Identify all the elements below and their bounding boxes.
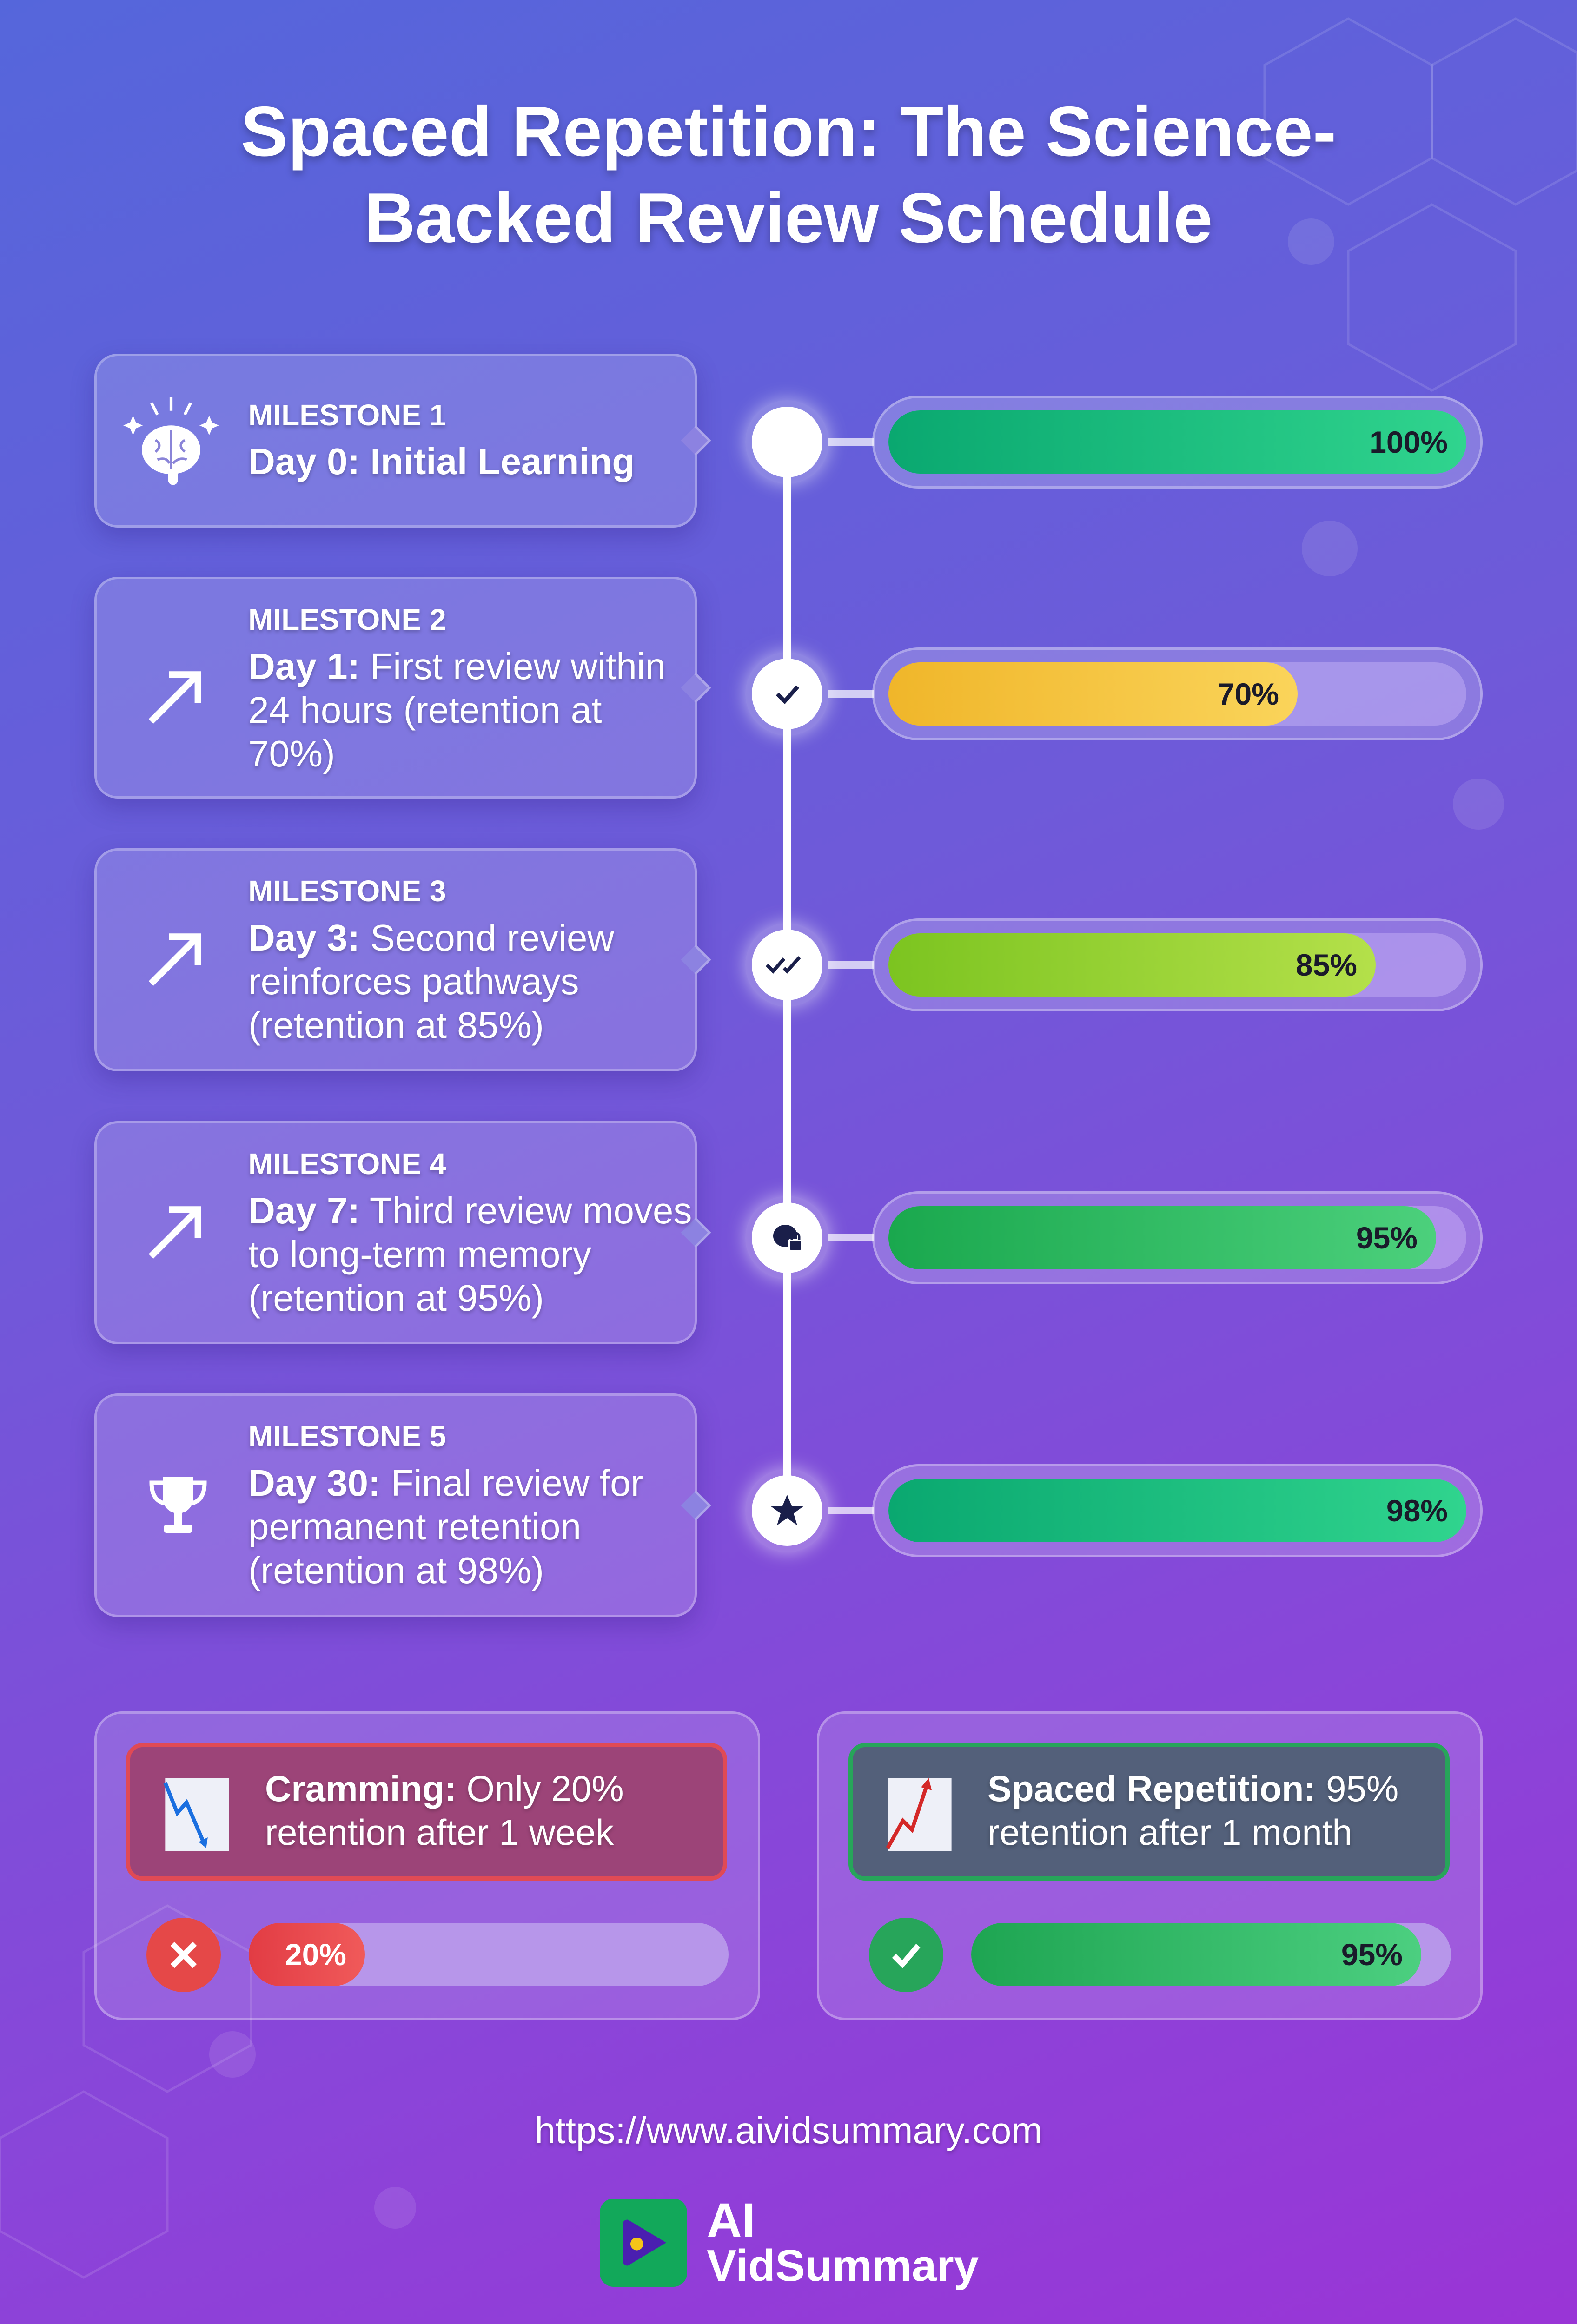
bar 100% [872, 396, 1483, 489]
milestone 2 card: Day 1: First review within [248, 646, 666, 687]
icon: arrow [143, 1198, 208, 1263]
milestone 3 card: MILESTONE 3 [248, 874, 446, 908]
panel: cramming [94, 1711, 760, 2020]
bar 20% [249, 1923, 729, 1986]
milestone 5 card: Day 30: Final review for [248, 1462, 643, 1504]
bar 20%: 20% [285, 1937, 346, 1972]
node 5: star [745, 1469, 829, 1552]
node 1 [745, 400, 829, 484]
bar 98% [872, 1464, 1483, 1557]
milestone 4 card [94, 1121, 697, 1344]
callout: cramming: retention after 1 week [265, 1812, 614, 1853]
panel: spaced repetition [817, 1711, 1483, 2020]
bar 85%: 85% [1296, 948, 1357, 982]
milestone 2 card: 24 hours (retention at [248, 689, 602, 731]
milestone 2 card: 70%) [248, 733, 335, 774]
icon: x [146, 1918, 221, 1992]
bar 70% [872, 647, 1483, 740]
milestone 5 card: (retention at 98%) [248, 1550, 544, 1591]
milestone 3 card: (retention at 85%) [248, 1004, 544, 1046]
title: Spaced Repetition: The Science- [241, 92, 1336, 171]
callout: cramming [126, 1743, 727, 1881]
milestone 5 card: permanent retention [248, 1506, 581, 1547]
callout: spaced: Spaced Repetition: 95% [987, 1768, 1398, 1809]
title: Backed Review Schedule [364, 178, 1213, 257]
logo: AI [707, 2193, 755, 2248]
milestone 5 card [94, 1393, 697, 1617]
bar 100%: 100% [1369, 425, 1448, 459]
logo [600, 2199, 1000, 2291]
node 4: brain lock [745, 1196, 829, 1280]
bar 95% [872, 1191, 1483, 1284]
icon: chart up [884, 1775, 961, 1854]
icon: arrow [143, 925, 208, 990]
icon: logo [600, 2199, 687, 2287]
title [0, 88, 1577, 261]
node 2: check [745, 652, 829, 736]
callout: cramming: Cramming: Only 20% [265, 1768, 624, 1809]
icon: trophy [143, 1470, 213, 1540]
icon: arrow [143, 663, 208, 728]
icon: brain [122, 393, 220, 491]
milestone 4 card: MILESTONE 4 [248, 1147, 446, 1181]
milestone 4 card: (retention at 95%) [248, 1277, 544, 1319]
milestone 4 card: to long-term memory [248, 1234, 591, 1275]
bar 85% [872, 918, 1483, 1011]
milestone 3 card [94, 848, 697, 1071]
milestone 4 card: Day 7: Third review moves [248, 1190, 692, 1231]
icon: check [869, 1918, 943, 1992]
node 3: double check [745, 923, 829, 1007]
timeline line [783, 442, 791, 1511]
url: https://www.aividsummary.com [535, 2110, 1042, 2151]
bar 95%: 95% [1356, 1221, 1418, 1255]
icon: chart down [162, 1775, 239, 1854]
bar 95%: 95% [1341, 1937, 1403, 1972]
text: Day 0: Initial Learning [248, 441, 635, 482]
milestone 3 card: reinforces pathways [248, 961, 579, 1002]
milestone 5 card: MILESTONE 5 [248, 1419, 446, 1453]
callout: spaced: retention after 1 month [987, 1812, 1352, 1853]
milestone 2 card [94, 577, 697, 799]
label: MILESTONE 1 [248, 398, 446, 432]
milestone 1 card [94, 354, 697, 528]
bar 95% [971, 1923, 1451, 1986]
milestone 3 card: Day 3: Second review [248, 917, 614, 958]
logo: VidSummary [707, 2241, 979, 2291]
bar 70%: 70% [1218, 677, 1279, 711]
bar 98%: 98% [1386, 1493, 1448, 1528]
milestone 2 card: MILESTONE 2 [248, 603, 446, 636]
callout: spaced [848, 1743, 1450, 1881]
